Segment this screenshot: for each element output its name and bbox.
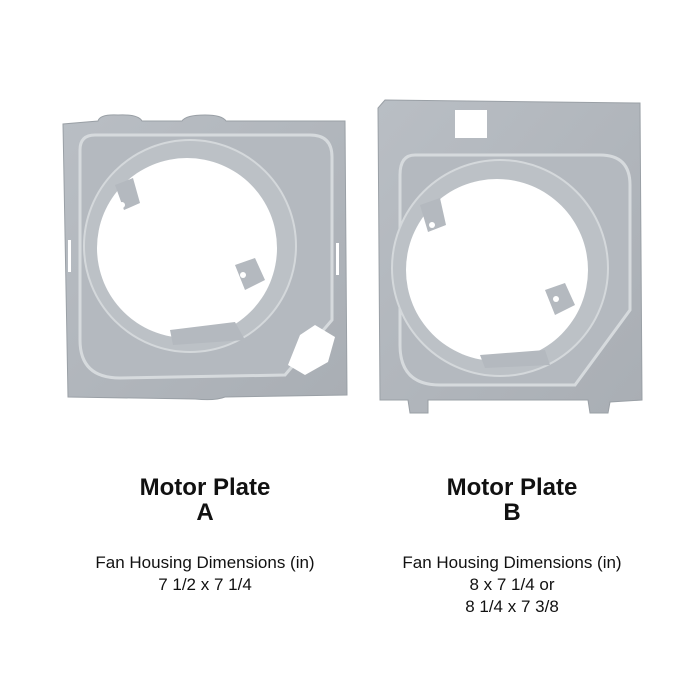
heading B: B xyxy=(503,499,521,526)
heading B: Motor Plate xyxy=(447,474,577,501)
dimensions A: 7 1/2 x 7 1/4 xyxy=(158,575,252,594)
heading B xyxy=(447,474,577,526)
dimensions A: Fan Housing Dimensions (in) xyxy=(95,553,315,572)
heading A: Motor Plate xyxy=(140,474,270,501)
plate A xyxy=(63,115,347,400)
illustration: motor plates xyxy=(62,100,642,414)
dimensions A xyxy=(95,553,315,594)
plate B xyxy=(378,100,642,413)
dimensions B xyxy=(402,553,622,616)
dimensions B: Fan Housing Dimensions (in) xyxy=(402,553,622,572)
dimensions B: 8 1/4 x 7 3/8 xyxy=(465,597,559,616)
heading A xyxy=(140,474,270,526)
dimensions B: 8 x 7 1/4 or xyxy=(469,575,555,594)
heading A: A xyxy=(196,499,214,526)
